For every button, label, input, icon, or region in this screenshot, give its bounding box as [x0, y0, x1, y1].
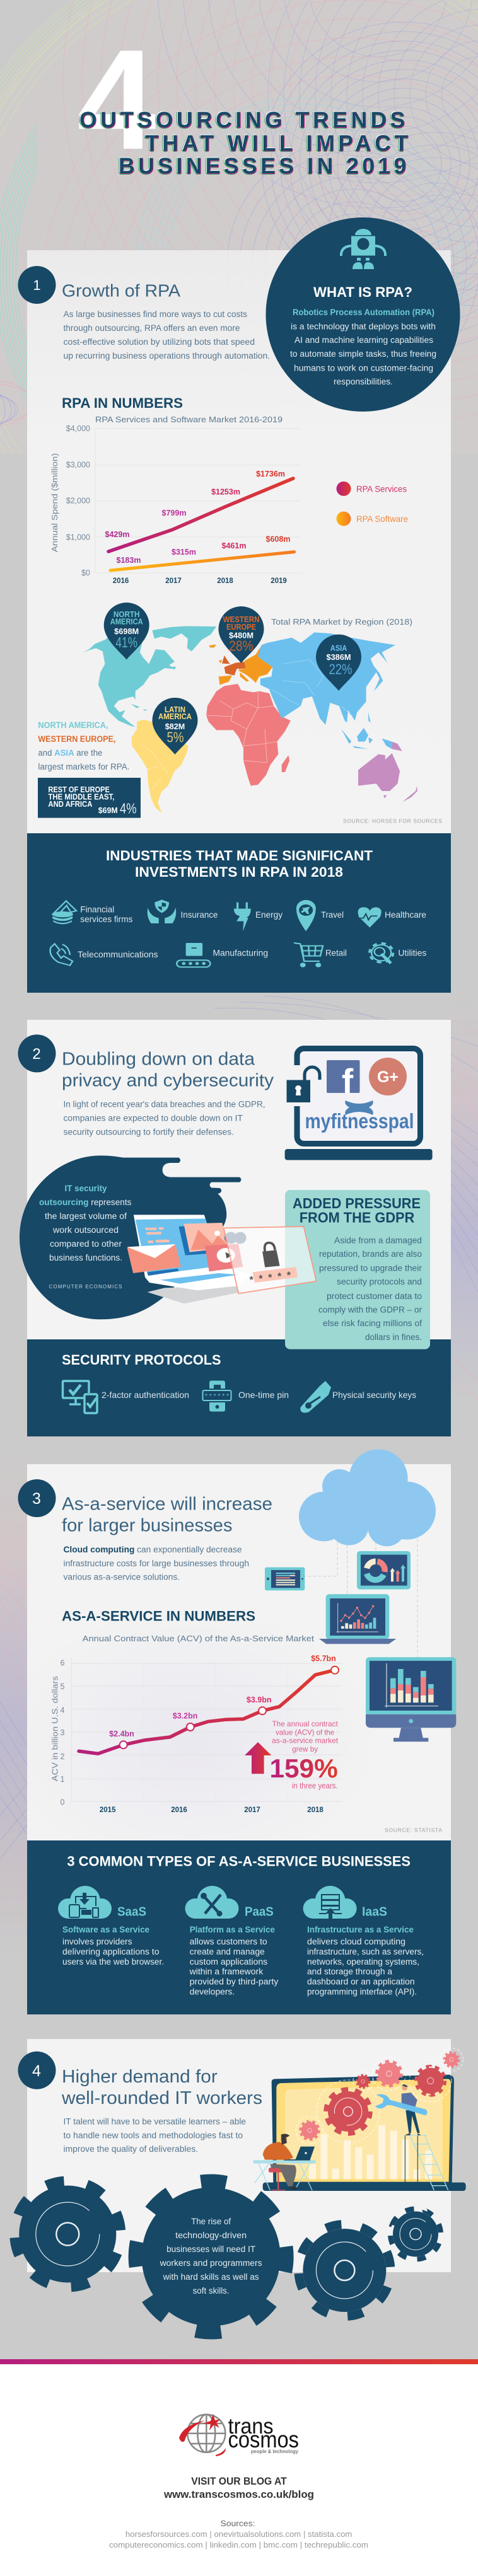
callout: 159 percent growth: value (ACV) of the	[276, 1728, 334, 1736]
circle: what is RPA: AI and machine learning capabilities	[294, 335, 433, 345]
text: cloud computing: Cloud computing can exponentially decrease	[63, 1545, 242, 1554]
callout: rest of Europe: THE MIDDLE EAST,	[48, 793, 114, 802]
section number 2	[18, 1034, 55, 1072]
heading: doubling down: Doubling down on data	[62, 1049, 255, 1070]
line chart: ACV: $5.7bn	[311, 1655, 336, 1663]
callout: GDPR pressure: reputation, brands are also	[319, 1249, 422, 1259]
circle: what is RPA: responsibilities.	[334, 377, 393, 386]
line chart: RPA market: $608m	[266, 534, 290, 543]
sources: computereconomics.com | linkedin.com | bmc.com | techrepublic.com	[109, 2540, 368, 2550]
pin: Latin America	[152, 698, 198, 754]
callout: rest of Europe	[38, 778, 141, 818]
column: PaaS: PaaS	[245, 1905, 274, 1919]
line chart: RPA market: $4,000	[66, 424, 90, 433]
heading: doubling down: privacy and cybersecurity	[62, 1070, 274, 1090]
industry labels: Manufacturing	[213, 948, 268, 958]
pin: Asia: ASIA	[330, 644, 347, 653]
callout: GDPR pressure	[285, 1190, 430, 1349]
heading: industries: INDUSTRIES THAT MADE SIGNIFICANT	[106, 848, 373, 863]
icon: laptop with breached brands	[285, 1049, 433, 1160]
column: SaaS: involves providers	[62, 1937, 132, 1946]
world map by region: Total RPA Market by Region (2018)	[271, 617, 412, 627]
icon: one-time pin	[203, 1380, 231, 1412]
circle: what is RPA: is a technology that deploys bots with	[291, 322, 436, 332]
callout: GDPR pressure: ADDED PRESSURE	[293, 1195, 421, 1211]
title: OUTSOURCING TRENDS	[79, 108, 405, 132]
text: IT talent: to handle new tools and methodologies fast to	[63, 2131, 243, 2140]
callout: 159 percent growth: 159%	[270, 1753, 338, 1783]
big gear: text: businesses will need IT	[166, 2244, 255, 2254]
panel: data privacy	[18, 1020, 451, 1436]
call to action: blog link	[163, 2475, 314, 2500]
pin: Western Europe: $480M	[229, 632, 254, 640]
line chart: RPA market: Annual Spend ($million)	[50, 453, 59, 552]
title: THAT WILL IMPACT	[145, 131, 408, 156]
callout blob: IT security outsourcing: work outsourced	[52, 1225, 119, 1235]
column: SaaS: Software as a Service	[62, 1924, 149, 1934]
text: largest markets: NORTH AMERICA,	[38, 720, 108, 730]
circle: what is RPA: humans to work on customer-facing	[294, 363, 433, 373]
text: data privacy intro: companies are expected to double down on IT	[63, 1113, 243, 1123]
big gear: text	[127, 2173, 295, 2341]
column: IaaS: infrastructure, such as servers,	[307, 1947, 424, 1956]
text: RPA intro: cost-effective solution by utilizing bots that speed	[63, 337, 255, 347]
column: IaaS	[303, 1886, 424, 1997]
logo: trans cosmos: cosmos	[228, 2427, 299, 2452]
panel: growth of RPA	[18, 250, 451, 833]
footer gradient bar	[0, 2359, 478, 2364]
line chart: RPA market: 2019	[271, 577, 287, 585]
source note: SOURCE: STATISTA	[385, 1827, 442, 1833]
chart legend	[337, 482, 408, 526]
industry labels: Insurance	[180, 910, 218, 920]
icon: 2-factor authentication	[63, 1381, 97, 1413]
icon: robot	[341, 229, 385, 269]
circle: what is RPA: to automate simple tasks, thus freeing	[290, 349, 436, 359]
text: RPA intro: up recurring business operations through automation.	[63, 351, 270, 361]
heading: Growth of RPA: Growth of RPA	[62, 281, 180, 301]
callout: rest of Europe: 4%	[120, 800, 137, 817]
text: largest markets	[38, 720, 129, 771]
logo: trans cosmos: trans	[228, 2414, 274, 2439]
column: PaaS: developers.	[190, 1987, 235, 1997]
pin: Asia: $386M	[327, 653, 351, 662]
heading: higher demand	[61, 2067, 262, 2108]
callout blob: IT security outsourcing: the largest volume of	[45, 1211, 127, 1221]
heading: as-a-service in numbers: AS-A-SERVICE IN NUMBERS	[62, 1609, 255, 1624]
callout: 159 percent growth: in three years.	[292, 1782, 338, 1791]
column: IaaS: IaaS	[362, 1905, 387, 1919]
circle: what is RPA	[266, 217, 460, 412]
title	[77, 20, 408, 179]
section number 1	[18, 266, 55, 304]
column: SaaS	[58, 1886, 164, 1967]
industry labels: Telecommunications	[78, 949, 158, 959]
password stars: *****	[249, 1270, 292, 1286]
text: largest markets: largest markets for RPA.	[38, 762, 129, 771]
line chart: ACV: 1	[61, 1775, 65, 1784]
heading: industries: INVESTMENTS IN RPA IN 2018	[135, 864, 343, 880]
circle: what is RPA: Robotics Process Automation (RPA)	[293, 308, 434, 317]
circle: what is RPA: WHAT IS RPA?	[313, 284, 412, 300]
column: PaaS: Platform as a Service	[190, 1924, 275, 1934]
line chart: RPA market: 2016	[113, 577, 129, 585]
pin: Western Europe	[218, 606, 264, 663]
line chart: RPA market	[50, 415, 303, 585]
pin: North America: NORTH	[114, 609, 140, 619]
line chart: RPA market: $0	[81, 569, 90, 577]
text: data privacy intro: In light of recent year's data breaches and the GDPR,	[63, 1099, 265, 1109]
text: IT talent: IT talent will have to be versatile learners – able	[63, 2117, 246, 2127]
title: 4	[77, 20, 156, 179]
callout blob: IT security outsourcing: outsourcing represents	[39, 1198, 132, 1207]
big gear: text: technology-driven	[175, 2231, 247, 2240]
section number 1: 1	[33, 277, 41, 293]
pin: North America: $698M	[114, 627, 139, 636]
line chart: ACV: 2	[61, 1752, 65, 1761]
line chart: ACV: 2017	[244, 1806, 260, 1814]
footer background	[0, 2364, 478, 2576]
callout: 159 percent growth: The annual contract	[272, 1719, 338, 1728]
big gear: small	[383, 2202, 448, 2267]
callout blob: IT security outsourcing: business functions.	[49, 1253, 122, 1262]
text: RPA intro	[63, 309, 270, 361]
section number 4: 4	[32, 2062, 41, 2080]
column: IaaS: programming interface (API).	[307, 1987, 417, 1997]
big gear: left	[0, 2166, 136, 2302]
callout: rest of Europe: REST OF EUROPE	[48, 785, 110, 794]
industry labels: Travel	[321, 910, 344, 920]
big gear: text: soft skills.	[193, 2286, 230, 2296]
text: IT talent: improve the quality of deliverables.	[63, 2144, 198, 2154]
section number 3: 3	[32, 1490, 41, 1508]
heading: higher demand: well-rounded IT workers	[61, 2088, 262, 2108]
column: PaaS: custom applications	[190, 1957, 267, 1967]
panel: industries	[27, 833, 451, 993]
callout: rest of Europe: AND AFRICA	[48, 800, 92, 809]
column: IaaS: and storage through a	[307, 1967, 392, 1976]
line chart: RPA market: 2018	[217, 577, 233, 585]
callout: GDPR pressure: else risk facing millions of	[323, 1319, 422, 1328]
panel: IT workers	[18, 2039, 451, 2272]
heading: doubling down	[62, 1049, 274, 1090]
callout: GDPR pressure: pressured to upgrade their	[319, 1264, 423, 1273]
column: IaaS: dashboard or an application	[307, 1977, 415, 1987]
line chart: ACV: 2018	[307, 1806, 324, 1814]
line chart: ACV: 4	[61, 1706, 65, 1714]
icon: physical security key	[300, 1381, 331, 1413]
line chart: RPA market: $183m	[117, 556, 141, 565]
pin: Western Europe: 28%	[229, 638, 254, 654]
callout: GDPR pressure: FROM THE GDPR	[300, 1209, 415, 1225]
callout: GDPR pressure: security protocols and	[337, 1277, 422, 1286]
logo: trans cosmos: people & technology	[251, 2448, 298, 2454]
industry labels: Healthcare	[385, 910, 426, 920]
pin: North America	[104, 603, 149, 659]
column: IaaS: networks, operating systems,	[307, 1957, 419, 1967]
callout blob: IT security outsourcing: COMPUTER ECONOMICS	[49, 1284, 122, 1290]
industry labels: Utilities	[398, 948, 426, 958]
line chart: ACV: Annual Contract Value (ACV) of the As-a-Service Market	[83, 1634, 315, 1643]
panel: as-a-service	[18, 1449, 457, 1840]
heading: higher demand: Higher demand for	[62, 2067, 218, 2087]
icon: one-time pin: ******	[205, 1393, 229, 1400]
column: IaaS: delivers cloud computing	[307, 1937, 405, 1946]
heading: common types: 3 COMMON TYPES OF AS-A-SERVICE BUSINESSES	[67, 1854, 411, 1869]
industry icons	[50, 899, 393, 967]
callout blob: IT security outsourcing	[20, 1155, 241, 1319]
line chart: RPA market: $799m	[162, 509, 186, 517]
illustration: cloud and devices	[265, 1449, 456, 1741]
heading: industries	[106, 848, 373, 880]
pin: Western Europe: EUROPE	[226, 622, 256, 632]
heading: security protocols: SECURITY PROTOCOLS	[62, 1352, 221, 1368]
icon: laptop with breached brands: f	[342, 1061, 354, 1100]
text: cloud computing: various as-a-service solutions.	[63, 1573, 180, 1582]
column: SaaS: users via the web browser.	[62, 1957, 164, 1967]
line chart: ACV: 6	[61, 1659, 65, 1668]
industry labels: Energy	[255, 910, 283, 920]
pin: Asia	[316, 635, 361, 691]
callout: 159 percent growth: grew by	[292, 1745, 318, 1753]
callout blob: IT security outsourcing: compared to other	[50, 1239, 122, 1249]
call to action: blog link: www.transcosmos.co.uk/blog	[163, 2488, 314, 2500]
panel: security protocols	[27, 1339, 451, 1436]
pin: Latin America: LATIN	[165, 705, 185, 714]
security labels	[102, 1390, 416, 1400]
column: SaaS: delivering applications to	[62, 1947, 159, 1956]
line chart: RPA market: 2017	[165, 577, 182, 585]
pin: North America: AMERICA	[110, 616, 143, 627]
heading: as-a-service: for larger businesses	[62, 1515, 232, 1535]
section number 3	[18, 1479, 55, 1517]
pin: Western Europe: WESTERN	[223, 615, 260, 624]
line chart: RPA market: $1,000	[66, 533, 90, 542]
pin: Asia: 22%	[329, 661, 352, 677]
callout: 159 percent growth	[245, 1719, 339, 1791]
callout: rest of Europe: $69M	[98, 806, 118, 815]
line chart: ACV: 3	[61, 1728, 65, 1737]
callout blob: IT security outsourcing: IT security	[64, 1184, 107, 1193]
sources: horsesforsources.com | onevirtualsolutions.com | statista.com	[125, 2529, 352, 2539]
industry labels: Retail	[325, 948, 347, 958]
heading: RPA in numbers: RPA IN NUMBERS	[62, 395, 183, 411]
text: cloud computing: infrastructure costs for large businesses through	[63, 1559, 249, 1568]
column: PaaS: create and manage	[190, 1947, 265, 1956]
pin: North America: 41%	[115, 634, 137, 650]
text: cloud computing	[63, 1545, 249, 1582]
callout: GDPR pressure: dollars in fines.	[365, 1332, 422, 1342]
line chart: RPA market: $1253m	[211, 488, 240, 497]
call to action: blog link: VISIT OUR BLOG AT	[191, 2475, 287, 2487]
security labels: 2-factor authentication	[102, 1390, 189, 1400]
line chart: RPA market: $1736m	[256, 470, 285, 478]
callout: GDPR pressure: protect customer data to	[327, 1291, 422, 1301]
column: PaaS: within a framework	[189, 1967, 263, 1976]
pin: Latin America: AMERICA	[158, 712, 192, 721]
line chart: ACV: 5	[61, 1682, 65, 1691]
illustration: laptop with security card	[127, 1215, 316, 1303]
column: PaaS: provided by third-party	[190, 1977, 279, 1987]
text: data privacy intro: security outsourcing to fortify their defenses.	[63, 1128, 234, 1137]
line chart: ACV: 0	[61, 1798, 65, 1806]
heading: as-a-service: As-a-service will increase	[62, 1494, 272, 1515]
title: BUSINESSES IN 2019	[119, 154, 406, 178]
line chart: RPA market: $2,000	[66, 497, 90, 505]
column: SaaS: SaaS	[117, 1905, 146, 1919]
world map by region	[83, 603, 417, 813]
security labels: One-time pin	[238, 1390, 289, 1400]
big gear: text: workers and programmers	[160, 2258, 262, 2268]
heading: as-a-service	[62, 1494, 272, 1535]
icon: laptop with breached brands: myfitnesspal	[305, 1109, 414, 1133]
column: PaaS: allows customers to	[190, 1937, 267, 1946]
panel: common types	[27, 1840, 451, 2014]
sources: Sources:	[221, 2519, 255, 2528]
callout: GDPR pressure: comply with the GDPR – or	[318, 1305, 422, 1315]
industry labels	[78, 904, 426, 959]
text: RPA intro: As large businesses find more ways to cut costs	[63, 309, 247, 319]
chart legend: RPA Services	[356, 484, 407, 494]
line chart: ACV: 2016	[171, 1806, 187, 1814]
industry labels: services firms	[80, 914, 132, 924]
text: largest markets: and ASIA are the	[38, 748, 102, 758]
column: IaaS: Infrastructure as a Service	[307, 1924, 414, 1934]
security labels: Physical security keys	[332, 1390, 416, 1400]
text: IT talent	[63, 2117, 246, 2154]
callout: GDPR pressure: Aside from a damaged	[334, 1235, 422, 1245]
pin: Latin America: $82M	[165, 722, 185, 731]
section number 2: 2	[32, 1046, 41, 1063]
line chart: RPA market: $3,000	[66, 460, 90, 469]
text: RPA intro: through outsourcing, RPA offers an even more	[63, 323, 240, 333]
line chart: RPA market: RPA Services and Software Market 2016-2019	[95, 415, 283, 424]
line chart: ACV	[50, 1634, 342, 1814]
icon: laptop with breached brands: G+	[377, 1068, 399, 1086]
logo: trans cosmos	[179, 2414, 299, 2456]
line chart: ACV: $2.4bn	[109, 1730, 134, 1738]
sources	[109, 2519, 368, 2550]
illustration: engineers and gears on laptop	[254, 2048, 466, 2191]
pin: Latin America: 5%	[166, 729, 184, 745]
text: data privacy intro	[63, 1099, 265, 1137]
line chart: ACV: ACV in billion U.S. dollars	[50, 1676, 59, 1781]
industry labels: Financial	[80, 904, 114, 915]
line chart: ACV: $3.9bn	[247, 1695, 272, 1704]
line chart: RPA market: $315m	[172, 548, 196, 557]
big gear: text: with hard skills as well as	[163, 2272, 259, 2282]
line chart: ACV: $3.2bn	[173, 1712, 197, 1721]
big gear: text: The rise of	[191, 2217, 231, 2226]
column: PaaS	[185, 1886, 279, 1997]
line chart: RPA market: $429m	[105, 530, 129, 539]
big gear: right	[285, 2210, 404, 2330]
text: largest markets: WESTERN EUROPE,	[38, 734, 115, 744]
section number 4	[18, 2052, 55, 2089]
line chart: RPA market: $461m	[222, 541, 246, 550]
callout: 159 percent growth: as-a-service market	[272, 1736, 339, 1745]
line chart: ACV: 2015	[100, 1806, 116, 1814]
source note: SOURCE: HORSES FOR SOURCES	[343, 817, 442, 824]
chart legend: RPA Software	[356, 514, 408, 524]
